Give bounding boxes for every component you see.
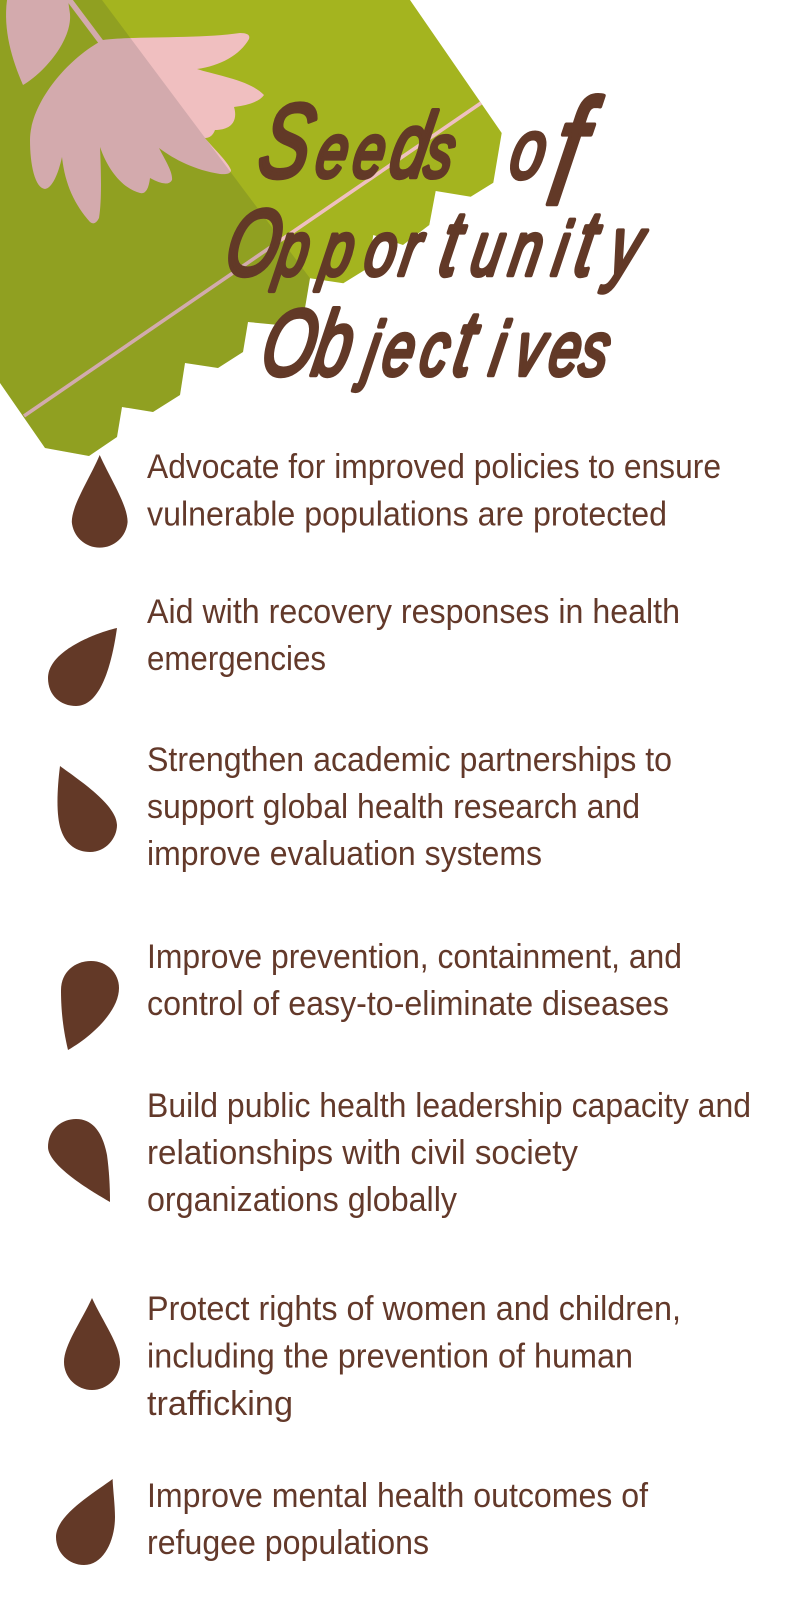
objective 6 text: including the prevention of human bbox=[147, 1338, 633, 1376]
title word: Objectives: e bbox=[376, 307, 423, 392]
darker shaded half bbox=[0, 0, 310, 456]
title word: Opportunity: y bbox=[598, 199, 654, 293]
objective 4 text: control of easy-to-eliminate diseases bbox=[147, 985, 669, 1023]
title word: Objectives: v bbox=[509, 307, 556, 392]
title bbox=[218, 69, 656, 395]
title word: Seeds: e bbox=[310, 109, 357, 194]
objective 7 bbox=[56, 1477, 648, 1565]
icon: seed 2 bbox=[48, 628, 117, 706]
title word: Objectives: s bbox=[574, 307, 618, 392]
objective 7 text bbox=[147, 1477, 648, 1562]
objective 3 text: support global health research and bbox=[147, 788, 640, 826]
header leaf illustration bbox=[0, 0, 502, 456]
objective 5 text: Build public health leadership capacity and bbox=[147, 1087, 751, 1125]
title word: Opportunity: n bbox=[504, 207, 551, 292]
title word: Seeds: s bbox=[419, 109, 463, 194]
objective 2 text bbox=[147, 593, 680, 678]
title word: Opportunity: t bbox=[568, 193, 609, 295]
objective 7 text: refugee populations bbox=[147, 1524, 429, 1562]
objective 3 text: Strengthen academic partnerships to bbox=[147, 741, 672, 779]
title word: Opportunity: p bbox=[269, 207, 317, 292]
objective 2 text: Aid with recovery responses in health bbox=[147, 593, 680, 631]
title word: Opportunity: i bbox=[547, 207, 577, 292]
objective 1 text: Advocate for improved policies to ensure bbox=[147, 448, 721, 486]
title word: Opportunity: O bbox=[218, 190, 291, 295]
objective 7 text: Improve mental health outcomes of bbox=[147, 1477, 648, 1515]
title word: of: f bbox=[537, 69, 610, 237]
title word: Opportunity: u bbox=[465, 207, 512, 292]
icon: seed 6 bbox=[64, 1298, 120, 1390]
objective 2 text: emergencies bbox=[147, 640, 326, 678]
objective 5 text bbox=[147, 1087, 751, 1219]
title word: Objectives: b bbox=[306, 293, 363, 395]
objective 4 bbox=[61, 938, 682, 1050]
flower leaf bbox=[6, 0, 70, 85]
objective 3 bbox=[58, 741, 672, 873]
objective 3 text bbox=[147, 741, 672, 873]
title word: Opportunity: t bbox=[433, 193, 474, 295]
icon: seed 7 bbox=[56, 1479, 115, 1565]
objective 6 bbox=[64, 1290, 681, 1423]
title word: Opportunity: o bbox=[358, 207, 405, 292]
objective 1 bbox=[72, 448, 721, 548]
objective 1 text: vulnerable populations are protected bbox=[147, 496, 667, 534]
green leaf shape bbox=[0, 0, 502, 456]
title word: Objectives: e bbox=[543, 307, 590, 392]
title word: Objectives: O bbox=[254, 290, 327, 395]
title word: Seeds: e bbox=[347, 109, 394, 194]
title word: Objectives: i bbox=[484, 307, 515, 392]
objective 5 bbox=[48, 1087, 751, 1219]
title word: Objectives: c bbox=[414, 307, 458, 392]
objective 6 text: trafficking bbox=[147, 1385, 293, 1423]
flower stem bbox=[68, 0, 104, 46]
icon: seed 1 bbox=[72, 455, 128, 548]
objective 4 text: Improve prevention, containment, and bbox=[147, 938, 682, 976]
leaf midrib bbox=[24, 103, 481, 416]
title word: Objectives: t bbox=[446, 293, 487, 395]
title word: Objectives: j bbox=[352, 307, 389, 392]
pink flower bbox=[6, 0, 264, 223]
icon: seed 5 bbox=[48, 1119, 110, 1202]
objective 6 text bbox=[147, 1290, 681, 1423]
title word: Opportunity: r bbox=[394, 207, 431, 292]
icon: seed 3 bbox=[58, 766, 117, 852]
flower blossom bbox=[30, 33, 264, 223]
title word: Seeds: d bbox=[383, 95, 442, 197]
objective 4 text bbox=[147, 938, 682, 1023]
objective 6 text: Protect rights of women and children, bbox=[147, 1290, 681, 1328]
icon: seed 4 bbox=[61, 961, 119, 1050]
objective 1 text bbox=[147, 448, 721, 534]
title word: Opportunity: p bbox=[314, 207, 362, 292]
title word: of: o bbox=[503, 102, 555, 196]
objective 2 bbox=[48, 593, 680, 706]
objective 5 text: organizations globally bbox=[147, 1181, 458, 1219]
objective 3 text: improve evaluation systems bbox=[147, 835, 542, 873]
objective 5 text: relationships with civil society bbox=[147, 1134, 579, 1172]
title word: Seeds: S bbox=[251, 82, 324, 200]
